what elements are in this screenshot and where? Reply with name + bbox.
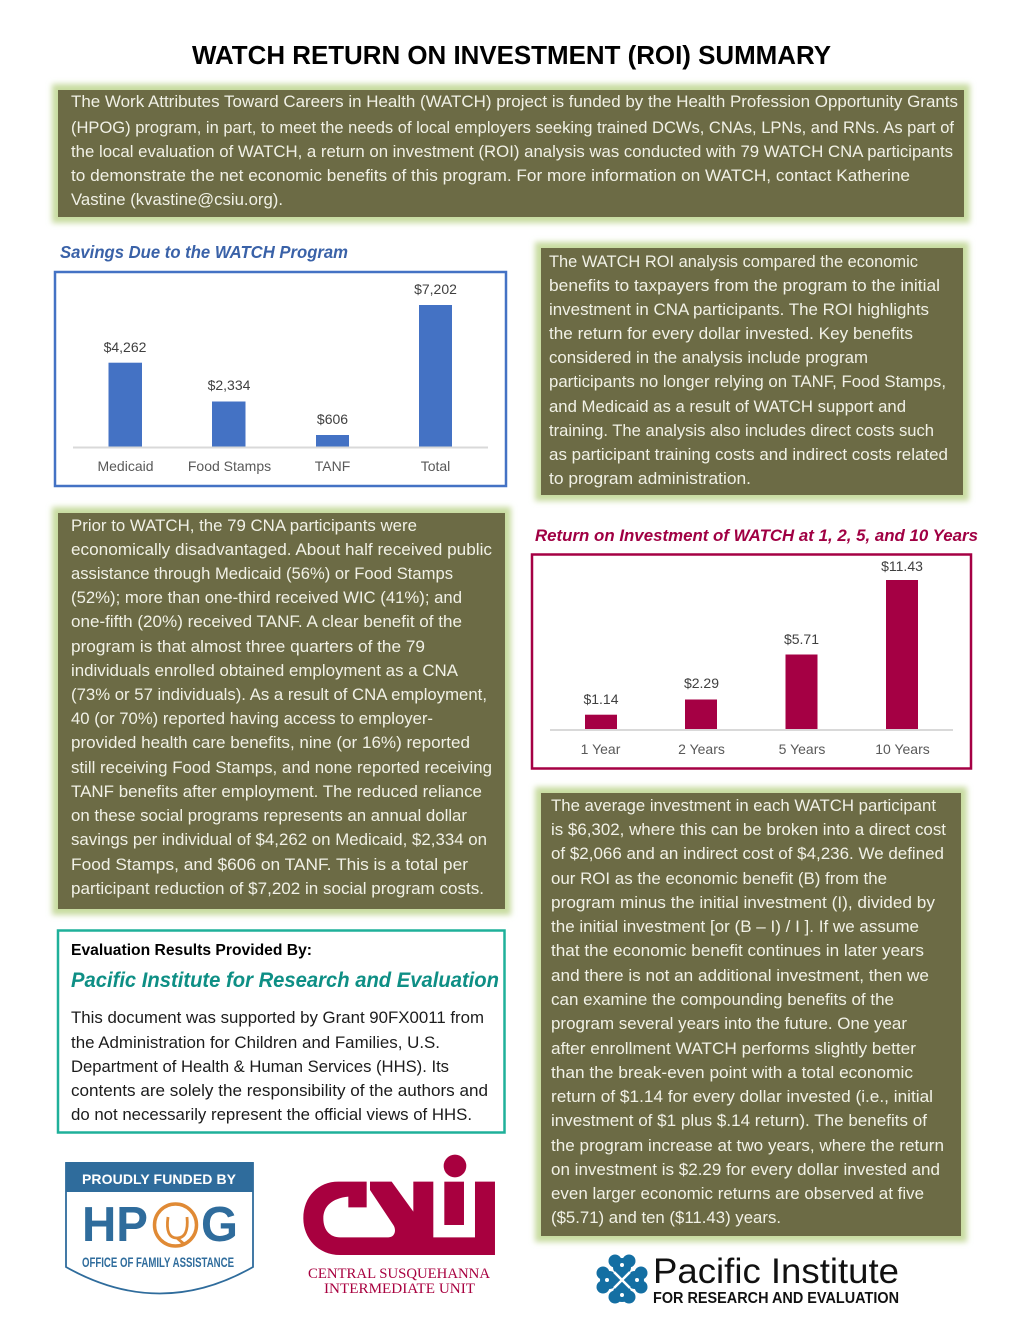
bar: 2 years: $2.29 [684,675,719,691]
panel: participants background: savings per individual of $4,262 on Medicaid, $2,334 on [71,830,487,849]
bar: 1 year: 1 Year [581,741,621,757]
panel: investment and compounding returns: that the economic benefit continues in later years [551,941,924,960]
panel: ROI analysis description: and Medicaid as a result of WATCH support and [549,397,906,416]
panel: evaluation credits: Department of Health & Human Services (HHS). Its [71,1057,449,1076]
panel: ROI analysis description: the return for every dollar invested. Key benefits [549,324,913,343]
logo: HPOG proudly funded by [66,1162,254,1294]
logo: Central Susquehanna Intermediate Unit: CENTRAL SUSQUEHANNA [308,1266,490,1282]
panel: investment and compounding returns [535,787,967,1242]
panel: investment and compounding returns: the program increase at two years, where the return [551,1136,944,1155]
logo: HPOG proudly funded by: HP [82,1197,148,1252]
panel: investment and compounding returns: even larger economic returns are observed at five [551,1184,924,1203]
bar: Total: $7,202 [414,281,457,297]
panel: participants background: one-fifth (20%) received TANF. A clear benefit of the [71,612,462,631]
panel: introduction: (HPOG) program, in part, to meet the needs of local employers seeking trained DCWs, CNAs, LPNs, and RNs. As part of [71,118,954,137]
panel: ROI analysis description: considered in the analysis include program [549,348,868,367]
panel: investment and compounding returns: our ROI as the economic benefit (B) from the [551,869,887,888]
bar: 10 years: 10 Years [875,741,930,757]
bar: 10 years: $11.43 [881,558,923,574]
panel: participants background: 40 (or 70%) reported having access to employer- [71,709,433,728]
heading: ROI chart: Return on Investment of WATCH at 1, 2, 5, and 10 Years [535,526,978,545]
panel: participants background: participant reduction of $7,202 in social program costs. [71,879,484,898]
panel: evaluation credits: contents are solely the responsibility of the authors and [71,1081,488,1100]
panel: participants background: Prior to WATCH, the 79 CNA participants were [71,516,417,535]
panel: participants background: program is that almost three quarters of the 79 [71,637,425,656]
panel: evaluation credits: do not necessarily represent the official views of HHS. [71,1105,472,1124]
logo: Central Susquehanna Intermediate Unit: INTERMEDIATE UNIT [324,1281,475,1297]
bar: 10 years [875,558,930,757]
panel: participants background: TANF benefits after employment. The reduced reliance [71,782,482,801]
panel: evaluation credits [58,930,504,1132]
logo: HPOG proudly funded by: OFFICE OF FAMILY ASSISTANCE [82,1254,234,1270]
bar: TANF: TANF [315,458,350,474]
panel: evaluation credits: Pacific Institute for Research and Evaluation [71,969,499,992]
panel: participants background: on these social programs represents an annual dollar [71,806,467,825]
panel: participants background: (52%); more than one-third received WIC (41%); and [71,588,462,607]
bar: Food Stamps: $2,334 [208,377,251,393]
panel: investment and compounding returns: program minus the initial investment (I), divided by [551,893,936,912]
panel: introduction: to demonstrate the net economic benefits of this program. For more information on WATCH, contact Katherine [71,166,910,185]
title: WATCH RETURN ON INVESTMENT (ROI) SUMMARY [192,42,831,70]
panel: participants background: Food Stamps, and $606 on TANF. This is a total per [71,855,468,874]
logo: HPOG proudly funded by: PROUDLY FUNDED BY [82,1171,237,1187]
panel: introduction: the local evaluation of WATCH, a return on investment (ROI) analysis was conducted with 79 WATCH CNA participants [71,142,953,161]
panel: evaluation credits: Evaluation Results Provided By: [71,942,312,959]
bar: Medicaid [97,339,154,474]
bar: Food Stamps [188,377,271,474]
panel: participants background [52,507,511,915]
panel: investment and compounding returns: than the break-even point with a total economic [551,1063,913,1082]
bar: Total: Total [421,458,450,474]
panel: participants background: assistance through Medicaid (56%) or Food Stamps [71,564,453,583]
panel: investment and compounding returns: can examine the compounding benefits of the [551,990,894,1009]
panel: participants background: individuals enrolled obtained employment as a CNA [71,661,459,680]
panel: ROI analysis description: The WATCH ROI analysis compared the economic [549,252,918,271]
panel: ROI analysis description: as participant training costs and indirect costs related [549,445,948,464]
panel: investment and compounding returns: The average investment in each WATCH participant [551,796,936,815]
logo: HPOG proudly funded by: G [201,1197,238,1252]
bar: TANF [315,411,350,474]
panel: introduction: The Work Attributes Toward Careers in Health (WATCH) project is funded by the Health Profession Opportunity Grants [71,92,958,111]
panel: investment and compounding returns: and there is not an additional investment, then we [551,966,929,985]
bar: 2 years [678,675,725,757]
panel: investment and compounding returns: after enrollment WATCH performs slightly better [551,1039,916,1058]
panel: ROI analysis description: training. The analysis also includes direct costs such [549,421,934,440]
panel: investment and compounding returns: the initial investment [or (B – I) / I ]. If we assume [551,917,919,936]
panel: participants background: (73% or 57 individuals). As a result of CNA employment, [71,685,487,704]
panel: ROI analysis description: participants no longer relying on TANF, Food Stamps, [549,372,946,391]
panel: investment and compounding returns: return of $1.14 for every dollar invested (i.e., initial [551,1087,933,1106]
panel: investment and compounding returns: on investment is $2.29 for every dollar invested and [551,1160,940,1179]
bar: 1 year: $1.14 [583,691,619,707]
panel: investment and compounding returns: investment of $1 plus $.14 return). The benefits of [551,1111,927,1130]
panel: investment and compounding returns: is $6,302, where this can be broken into a direct cost [551,820,946,839]
logo: Pacific Institute for Research and Evaluation: FOR RESEARCH AND EVALUATION [653,1290,899,1307]
panel: participants background: provided health care benefits, nine (or 16%) reported [71,733,470,752]
bar: 1 year [581,691,621,757]
panel: evaluation credits: the Administration for Children and Families, U.S. [71,1033,440,1052]
bar: 5 years: 5 Years [779,741,825,757]
bar chart: return on investment [532,554,971,768]
bar: Medicaid: $4,262 [104,339,147,355]
logo: Pacific Institute for Research and Evaluation [596,1252,899,1307]
bar: 5 years: $5.71 [784,631,819,647]
bar chart: savings due to WATCH [55,272,506,486]
panel: ROI analysis description: investment in CNA participants. The ROI highlights [549,300,929,319]
logo: Pacific Institute for Research and Evaluation: Pacific Institute [653,1252,899,1291]
panel: investment and compounding returns: ($5.71) and ten ($11.43) years. [551,1208,781,1227]
bar: Food Stamps: Food Stamps [188,458,271,474]
logo: Central Susquehanna Intermediate Unit [303,1155,495,1297]
panel: participants background: still receiving Food Stamps, and none reported receiving [71,758,492,777]
bar: Total [414,281,457,474]
bar: TANF: $606 [317,411,348,427]
panel: investment and compounding returns: program several years into the future. One year [551,1014,907,1033]
panel: participants background: economically disadvantaged. About half received public [71,540,492,559]
panel: ROI analysis description: benefits to taxpayers from the program to the initial [549,276,940,295]
panel: investment and compounding returns: of $2,066 and an indirect cost of $4,236. We defined [551,844,944,863]
bar: Medicaid: Medicaid [97,458,154,474]
bar: 5 years [779,631,825,757]
panel: ROI analysis description [535,242,969,501]
panel: introduction: Vastine (kvastine@csiu.org). [71,190,283,209]
bar: 2 years: 2 Years [678,741,725,757]
heading: savings chart: Savings Due to the WATCH Program [60,242,348,262]
panel: evaluation credits: This document was supported by Grant 90FX0011 from [71,1008,484,1027]
panel: introduction [52,84,970,223]
panel: ROI analysis description: to program administration. [549,469,751,488]
